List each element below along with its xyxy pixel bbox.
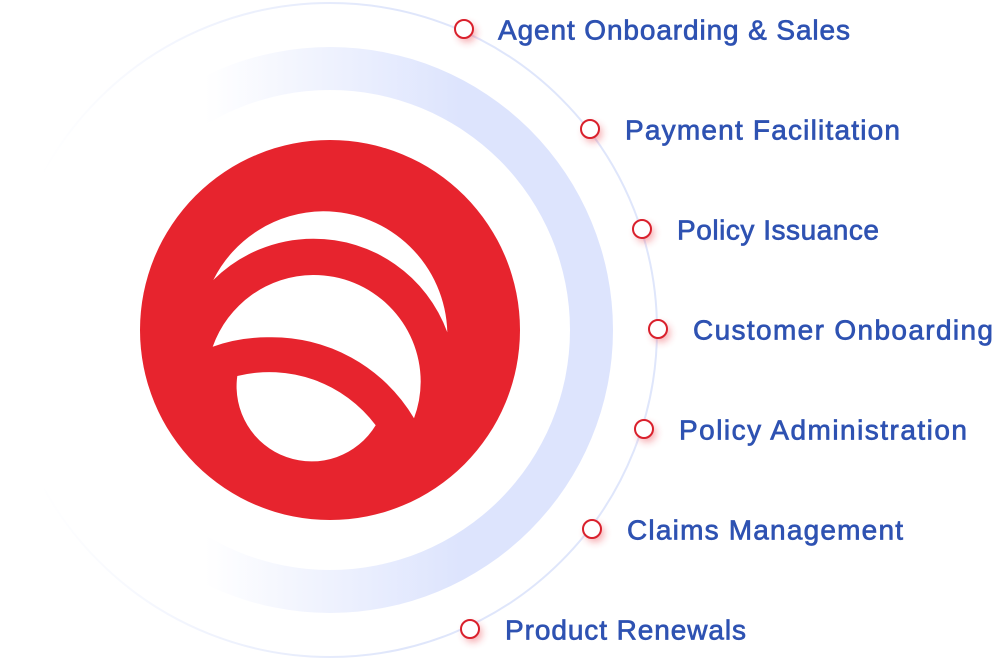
logo: red circle emblem xyxy=(140,140,520,520)
item: Product Renewals: Product Renewals xyxy=(505,614,746,646)
item: Customer Onboarding: Customer Onboarding xyxy=(693,314,993,346)
logo lower shape xyxy=(237,372,376,461)
item: Policy Administration: Policy Administration xyxy=(679,414,967,446)
outer thin ring xyxy=(3,3,657,657)
item: Policy Issuance: Policy Issuance xyxy=(677,214,879,246)
gradient ring band xyxy=(47,47,613,613)
item: Payment Facilitation: Payment Facilitation xyxy=(625,114,900,146)
logo middle shape xyxy=(213,275,421,418)
item: Claims Management: Claims Management xyxy=(627,514,903,546)
item: Agent Onboarding & Sales: Agent Onboarding & Sales xyxy=(498,14,850,46)
logo crescent xyxy=(213,211,447,332)
